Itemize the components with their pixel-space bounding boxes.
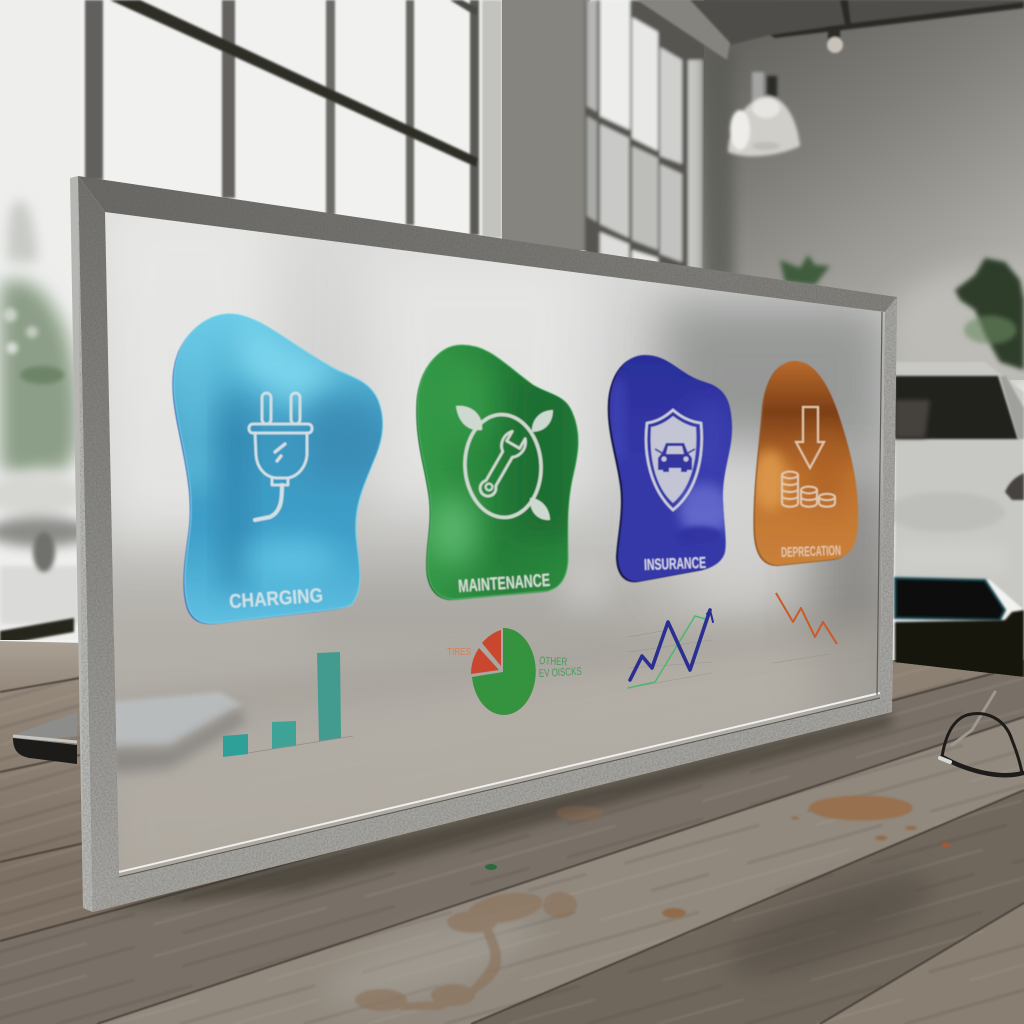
- icon: down arrow: [796, 407, 824, 468]
- icon: shield with car: [646, 410, 702, 510]
- plank: lower right plank: [820, 903, 1024, 1024]
- window left outdoor tree: [0, 196, 78, 640]
- pie chart: [447, 628, 582, 715]
- frame right: [880, 297, 897, 712]
- pie label: other EV costs: EV OISCKS: [539, 666, 582, 680]
- phone seen through glass: [110, 692, 242, 748]
- label: insurance: INSURANCE: [644, 555, 707, 574]
- blob: depreciation: [752, 361, 858, 566]
- light patch on stained plank: [334, 922, 529, 1002]
- pendant lamp: [728, 72, 800, 156]
- stain: coffee trail: [355, 888, 577, 1011]
- pie label: other EV costs: [539, 655, 582, 680]
- plank: light stained plank: [97, 717, 1024, 1024]
- line chart: depreciation decline: [773, 593, 837, 663]
- panel: depreciation: [752, 361, 858, 566]
- label: maintenance: MAINTENANCE: [457, 570, 551, 596]
- frame left: [78, 176, 119, 912]
- panel: charging: [170, 314, 383, 624]
- car lower grille: [895, 578, 1005, 620]
- stain: large round: [809, 796, 913, 820]
- plank: behind right: [893, 662, 1023, 688]
- left window frame: [85, 0, 502, 238]
- frame bottom: [93, 698, 892, 912]
- blob: charging: [170, 314, 383, 624]
- pie label: other EV costs: OTHER: [539, 655, 567, 668]
- panel: maintenance: [416, 345, 580, 600]
- frame shadow on table: [93, 712, 892, 912]
- plank seams: [0, 665, 1024, 1024]
- metal frame: [60, 170, 910, 920]
- car windshield: [895, 376, 1018, 439]
- right window: [585, 0, 710, 272]
- plank: dark plank: [471, 790, 1024, 1024]
- plants: [780, 255, 1024, 370]
- plank: shadowed front plank: [511, 674, 1024, 838]
- blob: maintenance: [416, 345, 580, 600]
- phone on table: [13, 712, 77, 764]
- glass panel: [100, 200, 890, 880]
- eyeglasses: [940, 692, 1023, 775]
- pie label: tires: TIRES: [447, 646, 471, 658]
- car glyph: [655, 443, 695, 472]
- frame top: [78, 176, 897, 312]
- stain: small spots: [556, 806, 950, 918]
- wood grain: [0, 662, 1024, 1024]
- white car: [885, 362, 1024, 680]
- blob: insurance: [608, 355, 732, 582]
- icon: wrench in ring with leaves: [456, 406, 553, 520]
- glass reflections: [106, 216, 885, 777]
- back wall: [704, 0, 1024, 380]
- label: depreciation: DEPRECATION: [781, 542, 841, 560]
- panel: insurance: [608, 355, 732, 582]
- frame inner highlights: [119, 693, 880, 872]
- pie slice: other EV costs: [472, 628, 536, 715]
- leaves: [456, 406, 553, 520]
- line chart: insurance trend: [628, 610, 713, 688]
- pie slice: tires: [471, 630, 501, 674]
- spotlight: [827, 28, 843, 53]
- frame texture: [60, 170, 910, 920]
- bar chart: [223, 652, 353, 757]
- concrete column: [502, 0, 590, 250]
- wooden table: [0, 641, 1024, 1024]
- icon: coin stacks: [782, 472, 835, 507]
- car headlight: [1005, 473, 1024, 500]
- ceiling and beam: [637, 0, 1024, 60]
- frame left side strip: [70, 176, 93, 912]
- background: showroom interior: [0, 0, 1024, 680]
- label: charging: CHARGING: [228, 585, 324, 613]
- icon: plug: [249, 393, 312, 520]
- green speck: [485, 864, 497, 870]
- dark patch on plank: [728, 870, 927, 976]
